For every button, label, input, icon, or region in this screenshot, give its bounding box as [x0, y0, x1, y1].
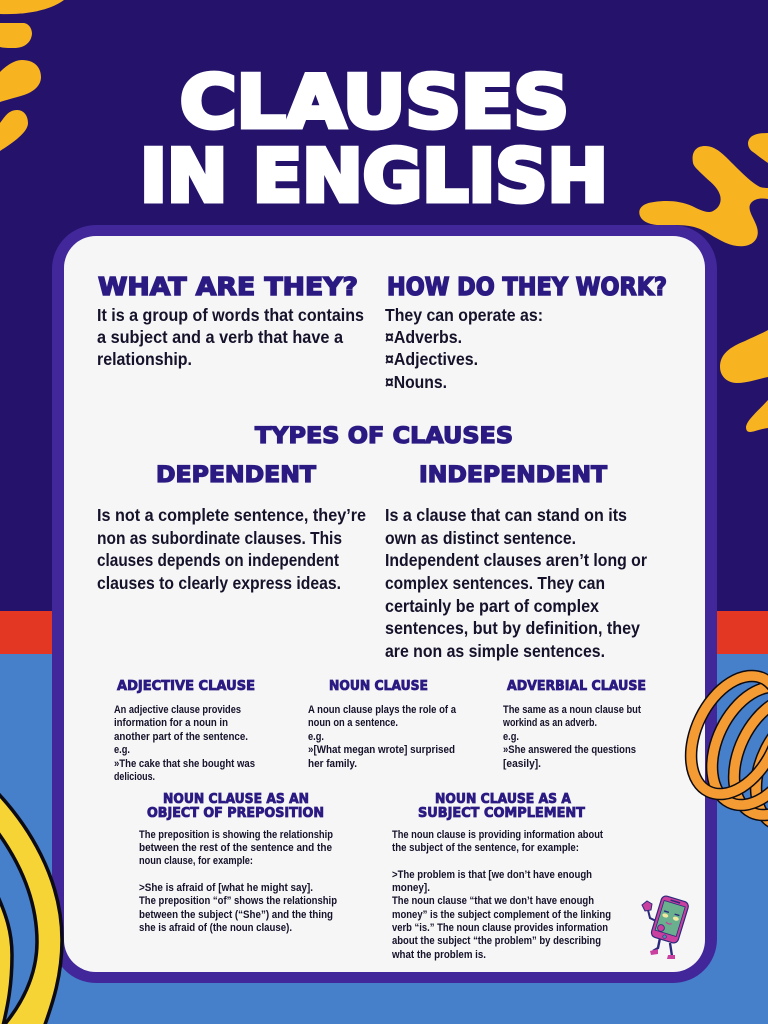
heading: adverbial clause: ADVERBIAL CLAUSE	[507, 678, 646, 694]
text: independent description: own as distinct sentence.	[385, 528, 576, 548]
text: object of preposition description: she is afraid of (the noun clause).	[139, 922, 292, 934]
text: dependent description: clauses depends on independent	[97, 550, 339, 570]
section: adjective clause	[114, 678, 255, 783]
text: noun clause description: noun on a sentence.	[308, 717, 398, 729]
decoration: yellow rings bottom left	[0, 785, 62, 1024]
text: adjective clause description	[114, 704, 255, 783]
decoration: yellow blobs top left	[0, 0, 64, 151]
section: noun clause as object of preposition	[139, 791, 337, 934]
background: red stripe	[0, 611, 768, 655]
text: object of preposition description: between the rest of the sentence and the	[139, 842, 332, 854]
text: usage list: They can operate as:	[385, 305, 543, 325]
text: independent description	[385, 505, 647, 661]
text: subject complement description: money” is the subject complement of the linking	[392, 909, 611, 921]
text: subject complement description: The noun clause “that we don’t have enough	[392, 895, 594, 907]
text: noun clause description: »[What megan wrote] surprised	[308, 744, 455, 756]
section: noun clause	[308, 678, 457, 770]
text: object of preposition description: >She is afraid of [what he might say].	[139, 882, 313, 894]
text: adverbial clause description: e.g.	[503, 731, 519, 743]
heading: adjective clause: ADJECTIVE CLAUSE	[117, 678, 255, 694]
section: what are they	[97, 272, 364, 369]
text: dependent description	[97, 505, 366, 593]
section: independent	[385, 463, 647, 661]
text: independent description: Is a clause that can stand on its	[385, 505, 627, 525]
text: adjective clause description: delicious.	[114, 771, 155, 783]
section: noun clause as subject complement	[391, 791, 611, 961]
heading: subject complement	[418, 791, 586, 821]
text: subject complement description	[391, 829, 611, 961]
heading: object of preposition	[147, 791, 324, 821]
decoration: yellow blobs right	[639, 133, 768, 432]
text: adjective clause description: information for a noun in	[114, 717, 228, 729]
text: dependent description: non as subordinate clauses. This	[97, 528, 342, 548]
heading: object of preposition: NOUN CLAUSE AS AN	[163, 791, 309, 807]
heading: what are they: WHAT ARE THEY?	[98, 272, 358, 301]
background: navy top band	[0, 0, 768, 612]
icon: smartphone character	[642, 895, 690, 959]
text: adjective clause description: An adjective clause provides	[114, 704, 241, 716]
heading: independent: INDEPENDENT	[419, 463, 607, 488]
text: adverbial clause description: »She answered the questions	[503, 744, 636, 756]
heading: how do they work: HOW DO THEY WORK?	[387, 272, 667, 301]
text: subject complement description: about the subject “the problem” by describing	[392, 935, 601, 947]
text: adjective clause description: »The cake that she bought was	[114, 758, 255, 770]
decoration: orange rings right	[673, 661, 768, 841]
text: independent description: are non as simple sentences.	[385, 641, 605, 661]
text: adjective clause description: e.g.	[114, 744, 130, 756]
text: independent description: complex sentences. They can	[385, 573, 605, 593]
title	[140, 60, 608, 218]
heading: noun clause: NOUN CLAUSE	[329, 678, 428, 694]
text: usage list: ¤Adjectives.	[385, 349, 478, 369]
text: adjective clause description: another part of the sentence.	[114, 731, 248, 743]
text: definition: relationship.	[97, 349, 192, 369]
text: object of preposition description: The preposition is showing the relationship	[139, 829, 333, 841]
text: noun clause description: e.g.	[308, 731, 324, 743]
text: independent description: certainly be part of complex	[385, 596, 599, 616]
text: independent description: sentences, but by definition, they	[385, 618, 640, 638]
text: noun clause description	[308, 704, 457, 770]
heading: object of preposition: OBJECT OF PREPOSITION	[147, 805, 324, 821]
background: blue bottom band	[0, 654, 768, 1024]
text: definition: a subject and a verb that have a	[97, 327, 343, 347]
text: subject complement description: what the problem is.	[391, 949, 486, 961]
section: dependent	[97, 463, 366, 593]
text: subject complement description: the subject of the sentence, for example:	[392, 842, 579, 854]
panel: main content card	[52, 225, 717, 983]
text: usage list: ¤Nouns.	[385, 372, 447, 392]
text: dependent description: clauses to clearly express ideas.	[97, 573, 341, 593]
text: object of preposition description: between the subject (“She”) and the thing	[139, 909, 333, 921]
title: IN ENGLISH	[140, 134, 608, 218]
text: definition: It is a group of words that contains	[97, 305, 364, 325]
heading: subject complement: SUBJECT COMPLEMENT	[418, 805, 586, 821]
heading: subject complement: NOUN CLAUSE AS A	[435, 791, 571, 807]
text: adverbial clause description: The same as a noun clause but	[503, 704, 641, 716]
text: usage list	[385, 305, 543, 392]
heading: types of clauses: TYPES OF CLAUSES	[255, 424, 513, 449]
text: subject complement description: verb “is.” The noun clause provides information	[392, 922, 608, 934]
text: subject complement description: money].	[392, 882, 430, 894]
text: definition	[97, 305, 364, 369]
text: noun clause description: A noun clause plays the role of a	[308, 704, 457, 716]
text: noun clause description: her family.	[308, 758, 357, 770]
text: adverbial clause description: [easily].	[503, 758, 541, 770]
text: adverbial clause description	[502, 704, 641, 770]
title: CLAUSES	[180, 60, 569, 144]
text: subject complement description: The noun clause is providing information about	[392, 829, 603, 841]
text: usage list: ¤Adverbs.	[385, 327, 462, 347]
text: subject complement description: >The problem is that [we don’t have enough	[392, 869, 592, 881]
text: object of preposition description: The preposition “of” shows the relationship	[139, 895, 337, 907]
text: independent description: Independent clauses aren’t long or	[385, 550, 647, 570]
section: how do they work	[385, 272, 667, 392]
text: adverbial clause description: workind as an adverb.	[502, 717, 597, 729]
text: dependent description: Is not a complete sentence, they’re	[97, 505, 366, 525]
text: object of preposition description: noun clause, for example:	[139, 855, 253, 867]
section: adverbial clause	[502, 678, 646, 770]
text: object of preposition description	[139, 829, 337, 934]
heading: dependent: DEPENDENT	[156, 463, 316, 488]
